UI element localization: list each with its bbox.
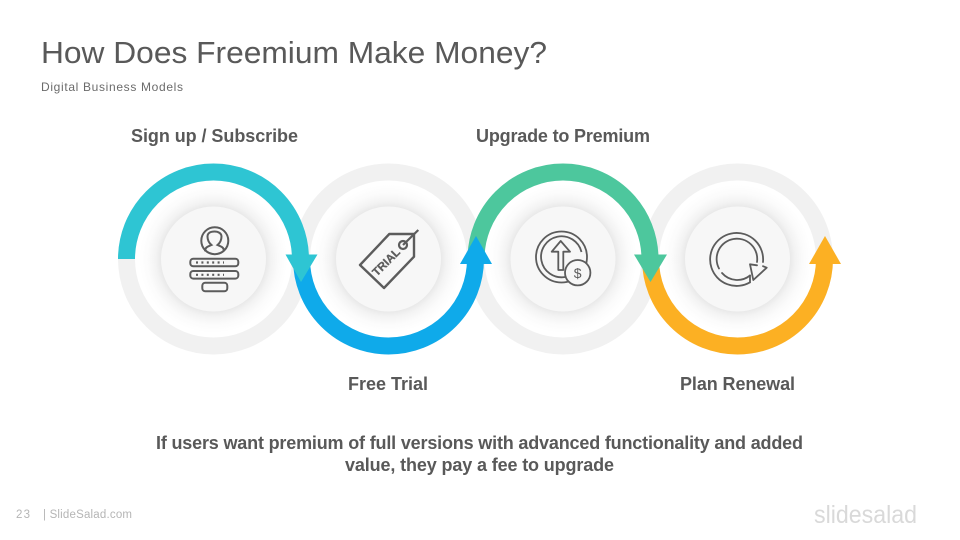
inner discs with soft shadow	[136, 181, 816, 337]
label: plan renewal: Plan Renewal	[680, 374, 795, 394]
icon: trial tag: TRIAL	[370, 246, 403, 279]
arrow: blue arc with head	[302, 236, 492, 346]
arrow head: green	[634, 254, 667, 282]
footer page number and site: 23	[16, 509, 30, 521]
icon: trial tag	[360, 230, 418, 288]
description text	[156, 433, 803, 475]
subtitle: Digital Business Models	[41, 80, 183, 94]
gray background rings	[126, 172, 824, 346]
description text: value, they pay a fee to upgrade	[345, 455, 614, 475]
arrow: teal arc with head	[126, 172, 318, 282]
label: free trial: Free Trial	[348, 374, 428, 394]
icon: upgrade coin: $	[574, 265, 582, 281]
icon: user sign-up form	[190, 227, 238, 291]
arrow: yellow arc with head	[650, 236, 841, 346]
title: How Does Freemium Make Money?	[41, 35, 547, 70]
description text: If users want premium of full versions with advanced functionality and added	[156, 433, 803, 453]
arrow: green arc	[476, 172, 650, 259]
logo text: slidesalad	[814, 501, 917, 529]
label: upgrade: Upgrade to Premium	[476, 126, 650, 146]
footer page number and site: | SlideSalad.com	[43, 509, 132, 521]
label: sign up: Sign up / Subscribe	[131, 126, 298, 146]
icon: renewal cycle	[710, 233, 767, 286]
icon: upgrade coin	[536, 232, 590, 285]
